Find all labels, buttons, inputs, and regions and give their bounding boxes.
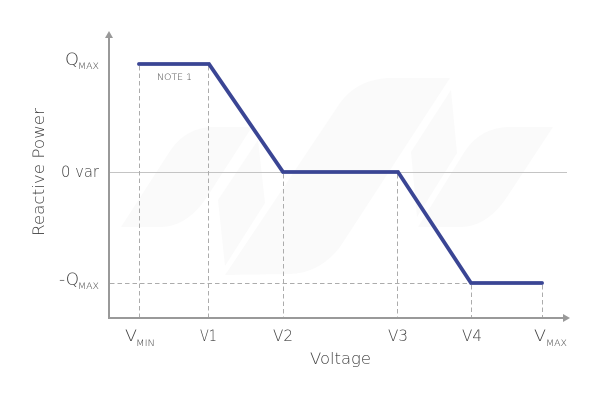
- label: Q max: MAX: [78, 62, 99, 72]
- label: minus Q max: [59, 270, 99, 292]
- x tick labels: [125, 326, 567, 349]
- label: V min: MIN: [136, 339, 155, 349]
- label: V1: V1: [200, 326, 217, 345]
- axes: [105, 31, 570, 322]
- watermark logo: [121, 78, 553, 275]
- label: V4: V4: [462, 326, 482, 345]
- note label: NOTE 1: [157, 73, 192, 83]
- zero reference line: [109, 172, 567, 174]
- y axis arrowhead: [105, 31, 113, 38]
- label: V max: [534, 326, 567, 349]
- y axis title: Reactive Power: [29, 108, 48, 236]
- reactive power curve: [139, 64, 542, 283]
- x axis arrowhead: [563, 314, 570, 322]
- label: 0 var: 0 var: [61, 162, 99, 181]
- label: minus Q max: MAX: [78, 282, 99, 292]
- y tick labels: [59, 50, 99, 292]
- label: minus Q max: -Q: [59, 270, 79, 290]
- label: V2: V2: [273, 326, 293, 345]
- label: V3: V3: [388, 326, 408, 345]
- label: V min: [125, 326, 155, 349]
- label: V min: V: [125, 326, 137, 345]
- label: Q max: [65, 50, 99, 72]
- x axis title: Voltage: [310, 349, 371, 368]
- label: V max: V: [534, 326, 546, 345]
- label: V max: MAX: [546, 339, 567, 349]
- dashed guide lines: [110, 66, 542, 318]
- label: Q max: Q: [65, 50, 79, 70]
